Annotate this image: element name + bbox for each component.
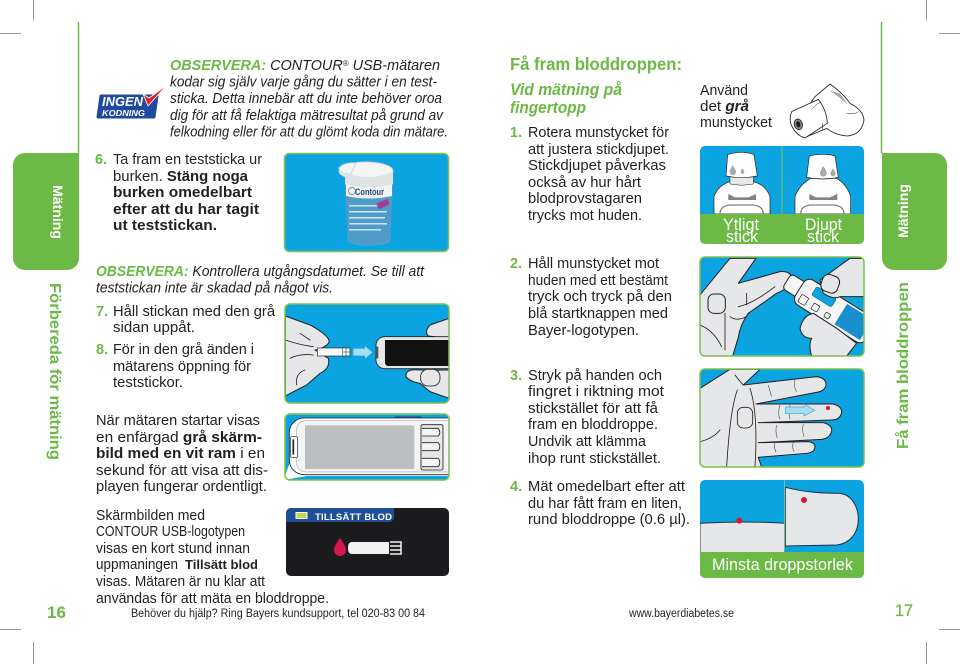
step 3 text: 3. <box>510 368 522 384</box>
step 2 text: Bayer-logotypen. <box>528 323 639 339</box>
step 1 text: Rotera munstycket för <box>528 125 669 141</box>
panel: press lancing device <box>700 257 878 356</box>
step 1 text: också av hur hårt <box>528 175 641 191</box>
note: Observera automatic coding: ® <box>343 59 349 68</box>
steps 7 and 8 text: teststickor. <box>113 375 183 391</box>
note: Observera automatic coding: USB-mätaren <box>349 58 440 74</box>
right tab: Mätning: Mätning <box>896 184 911 238</box>
note: Observera automatic coding: kodar sig själv varje gång du sätter i en test- <box>170 74 437 90</box>
note: Observera automatic coding: felkodning eller för att du glömt koda din mätare. <box>170 124 448 140</box>
icon: shallow depth cap <box>714 152 770 214</box>
step 3 text: Stryk på handen och <box>528 368 662 384</box>
text: white frame screen: När mätaren startar visas <box>96 413 260 429</box>
icon: grey lancet cap <box>790 84 864 138</box>
text: white frame screen: en enfärgad grå skärm- <box>96 430 262 446</box>
footer: website: www.bayerdiabetes.se <box>628 608 734 620</box>
step 4 text: du har fått fram en liten, <box>528 496 682 512</box>
step 1 text: trycks mot huden. <box>528 208 642 224</box>
text: logo screen and prompt: användas för att mäta en bloddroppe. <box>96 591 329 607</box>
steps 7 and 8 text: 7. <box>96 304 108 320</box>
left tab: Mätning <box>13 22 79 270</box>
step 2 text: blå startknappen med <box>528 306 668 322</box>
panel: stroke hand toward puncture <box>700 369 864 467</box>
panel: test strip jar <box>284 154 448 252</box>
panel: depth selection <box>700 146 864 244</box>
step 3 text: ihop runt stickstället. <box>528 451 661 467</box>
step 2 text: huden med ett bestämt <box>528 273 668 289</box>
icon: deep depth cap <box>795 154 851 214</box>
panel: insert strip into meter <box>285 304 456 403</box>
page number 17: 17 <box>895 601 913 620</box>
text: logo screen and prompt: uppmaningen <box>96 557 178 573</box>
text: use grey cap <box>700 83 772 131</box>
steps 7 and 8 text: mätarens öppning för <box>113 359 251 375</box>
step 1 text: 1. <box>510 125 522 141</box>
step 4 text: Mät omedelbart efter att <box>528 479 685 495</box>
page number 16: 16 <box>47 603 66 622</box>
step 4 text: 4. <box>510 479 522 495</box>
note: Observera automatic coding <box>170 58 448 140</box>
text: logo screen and prompt <box>96 508 329 607</box>
heading: få fram bloddroppen: Få fram bloddroppen: <box>510 54 682 74</box>
step 4 text: rund bloddroppe (0.6 µl). <box>528 512 690 528</box>
right section label: Få fram bloddroppen <box>894 282 912 449</box>
footer: support phone: Behöver du hjälp? Ring Bayers kundsupport, tel 020-83 00 84 <box>131 608 426 620</box>
subheading: fingertopp <box>510 80 622 117</box>
caption: shallow and deep puncture: Djupt <box>805 216 842 234</box>
steps 7 and 8 text: Håll stickan med den grå <box>113 304 276 320</box>
step 3 text: fram en bloddroppe. <box>528 417 658 433</box>
right tab: Mätning <box>882 22 947 270</box>
step 3 text: stickstället för att få <box>528 401 659 417</box>
text: use grey cap: munstycket <box>700 115 772 131</box>
step 6 text: ut teststickan. <box>113 218 217 234</box>
steps 7 and 8 text: sidan uppåt. <box>113 320 195 336</box>
text: white frame screen <box>96 413 268 495</box>
panel: meter white frame screen <box>286 414 448 480</box>
step 6 text <box>95 152 262 234</box>
panel: add blood screen <box>286 508 449 576</box>
note: Observera expiry date: OBSERVERA: Kontrollera utgångsdatumet. Se till att <box>96 264 425 280</box>
step 6 text: burken. Stäng noga <box>113 169 249 185</box>
panel: minimum drop size <box>700 480 864 579</box>
subheading: fingertopp: Vid mätning på <box>510 80 622 99</box>
note: Observera automatic coding: OBSERVERA: CONTOUR <box>170 58 343 74</box>
icon: Ingen kodning logo: INGEN <box>102 94 144 109</box>
text: logo screen and prompt: Tillsätt blod <box>185 557 258 572</box>
step 3 text <box>510 368 664 467</box>
caption: shallow and deep puncture: stick <box>807 228 840 246</box>
text: white frame screen: playen fungerar ordentligt. <box>96 479 267 495</box>
left section label: Förbereda för mätning <box>46 283 63 460</box>
text: logo screen and prompt: visas en kort stund innan <box>96 541 250 557</box>
step 1 text: blodprovstagaren <box>528 191 642 207</box>
step 2 text: Håll munstycket mot <box>528 256 659 272</box>
step 3 text: Undvik att klämma <box>528 434 647 450</box>
step 1 text: att justera stickdjupet. <box>528 142 669 158</box>
text: logo screen and prompt: visas. Mätaren är nu klar att <box>96 574 265 590</box>
step 6 text: efter att du har tagit <box>113 202 259 218</box>
caption: shallow and deep puncture <box>723 216 842 246</box>
step 1 text: Stickdjupet påverkas <box>528 158 666 174</box>
note: Observera automatic coding: sticka. Detta innebär att du inte behöver oroa <box>170 91 442 107</box>
step 2 text: 2. <box>510 256 522 272</box>
panel: test strip jar: Contour <box>355 187 384 197</box>
icon: Ingen kodning logo <box>98 85 167 118</box>
text: use grey cap: det grå <box>700 99 749 115</box>
subheading: fingertopp: fingertopp <box>510 98 586 117</box>
step 6 text: Ta fram en teststicka ur <box>113 152 262 168</box>
step 2 text: tryck och tryck på den <box>528 289 672 305</box>
icon: Ingen kodning logo: KODNING <box>102 108 145 118</box>
left tab: Mätning: Mätning <box>50 185 65 239</box>
panel: add blood screen: TILLSÄTT BLOD <box>315 512 392 523</box>
caption: shallow and deep puncture: stick <box>726 228 759 246</box>
text: logo screen and prompt: CONTOUR USB-logotypen <box>96 524 245 540</box>
steps 7 and 8 text: 8. <box>96 342 108 358</box>
step 3 text: fingret i riktning mot <box>528 384 664 400</box>
step 6 text: 6. <box>95 152 107 168</box>
step 6 text: burken omedelbart <box>113 185 252 201</box>
step 4 text <box>510 479 690 528</box>
caption: Minsta droppstorlek: Minsta droppstorlek <box>712 556 854 574</box>
note: Observera expiry date <box>96 264 425 296</box>
step 1 text <box>510 125 669 224</box>
text: white frame screen: bild med en vit ram i en <box>96 446 265 462</box>
note: Observera expiry date: teststickan inte är skadad på något vis. <box>96 280 333 296</box>
steps 7 and 8 text: För in den grå änden i <box>113 342 254 358</box>
step 2 text <box>510 256 672 339</box>
text: logo screen and prompt: Skärmbilden med <box>96 508 205 524</box>
note: Observera automatic coding: dig för att få felaktiga mätresultat på grund av <box>170 108 444 124</box>
text: white frame screen: sekund för att visa att dis- <box>96 463 268 479</box>
steps 7 and 8 text <box>96 304 276 391</box>
text: use grey cap: Använd <box>700 83 748 99</box>
caption: shallow and deep puncture: Ytligt <box>723 216 759 234</box>
